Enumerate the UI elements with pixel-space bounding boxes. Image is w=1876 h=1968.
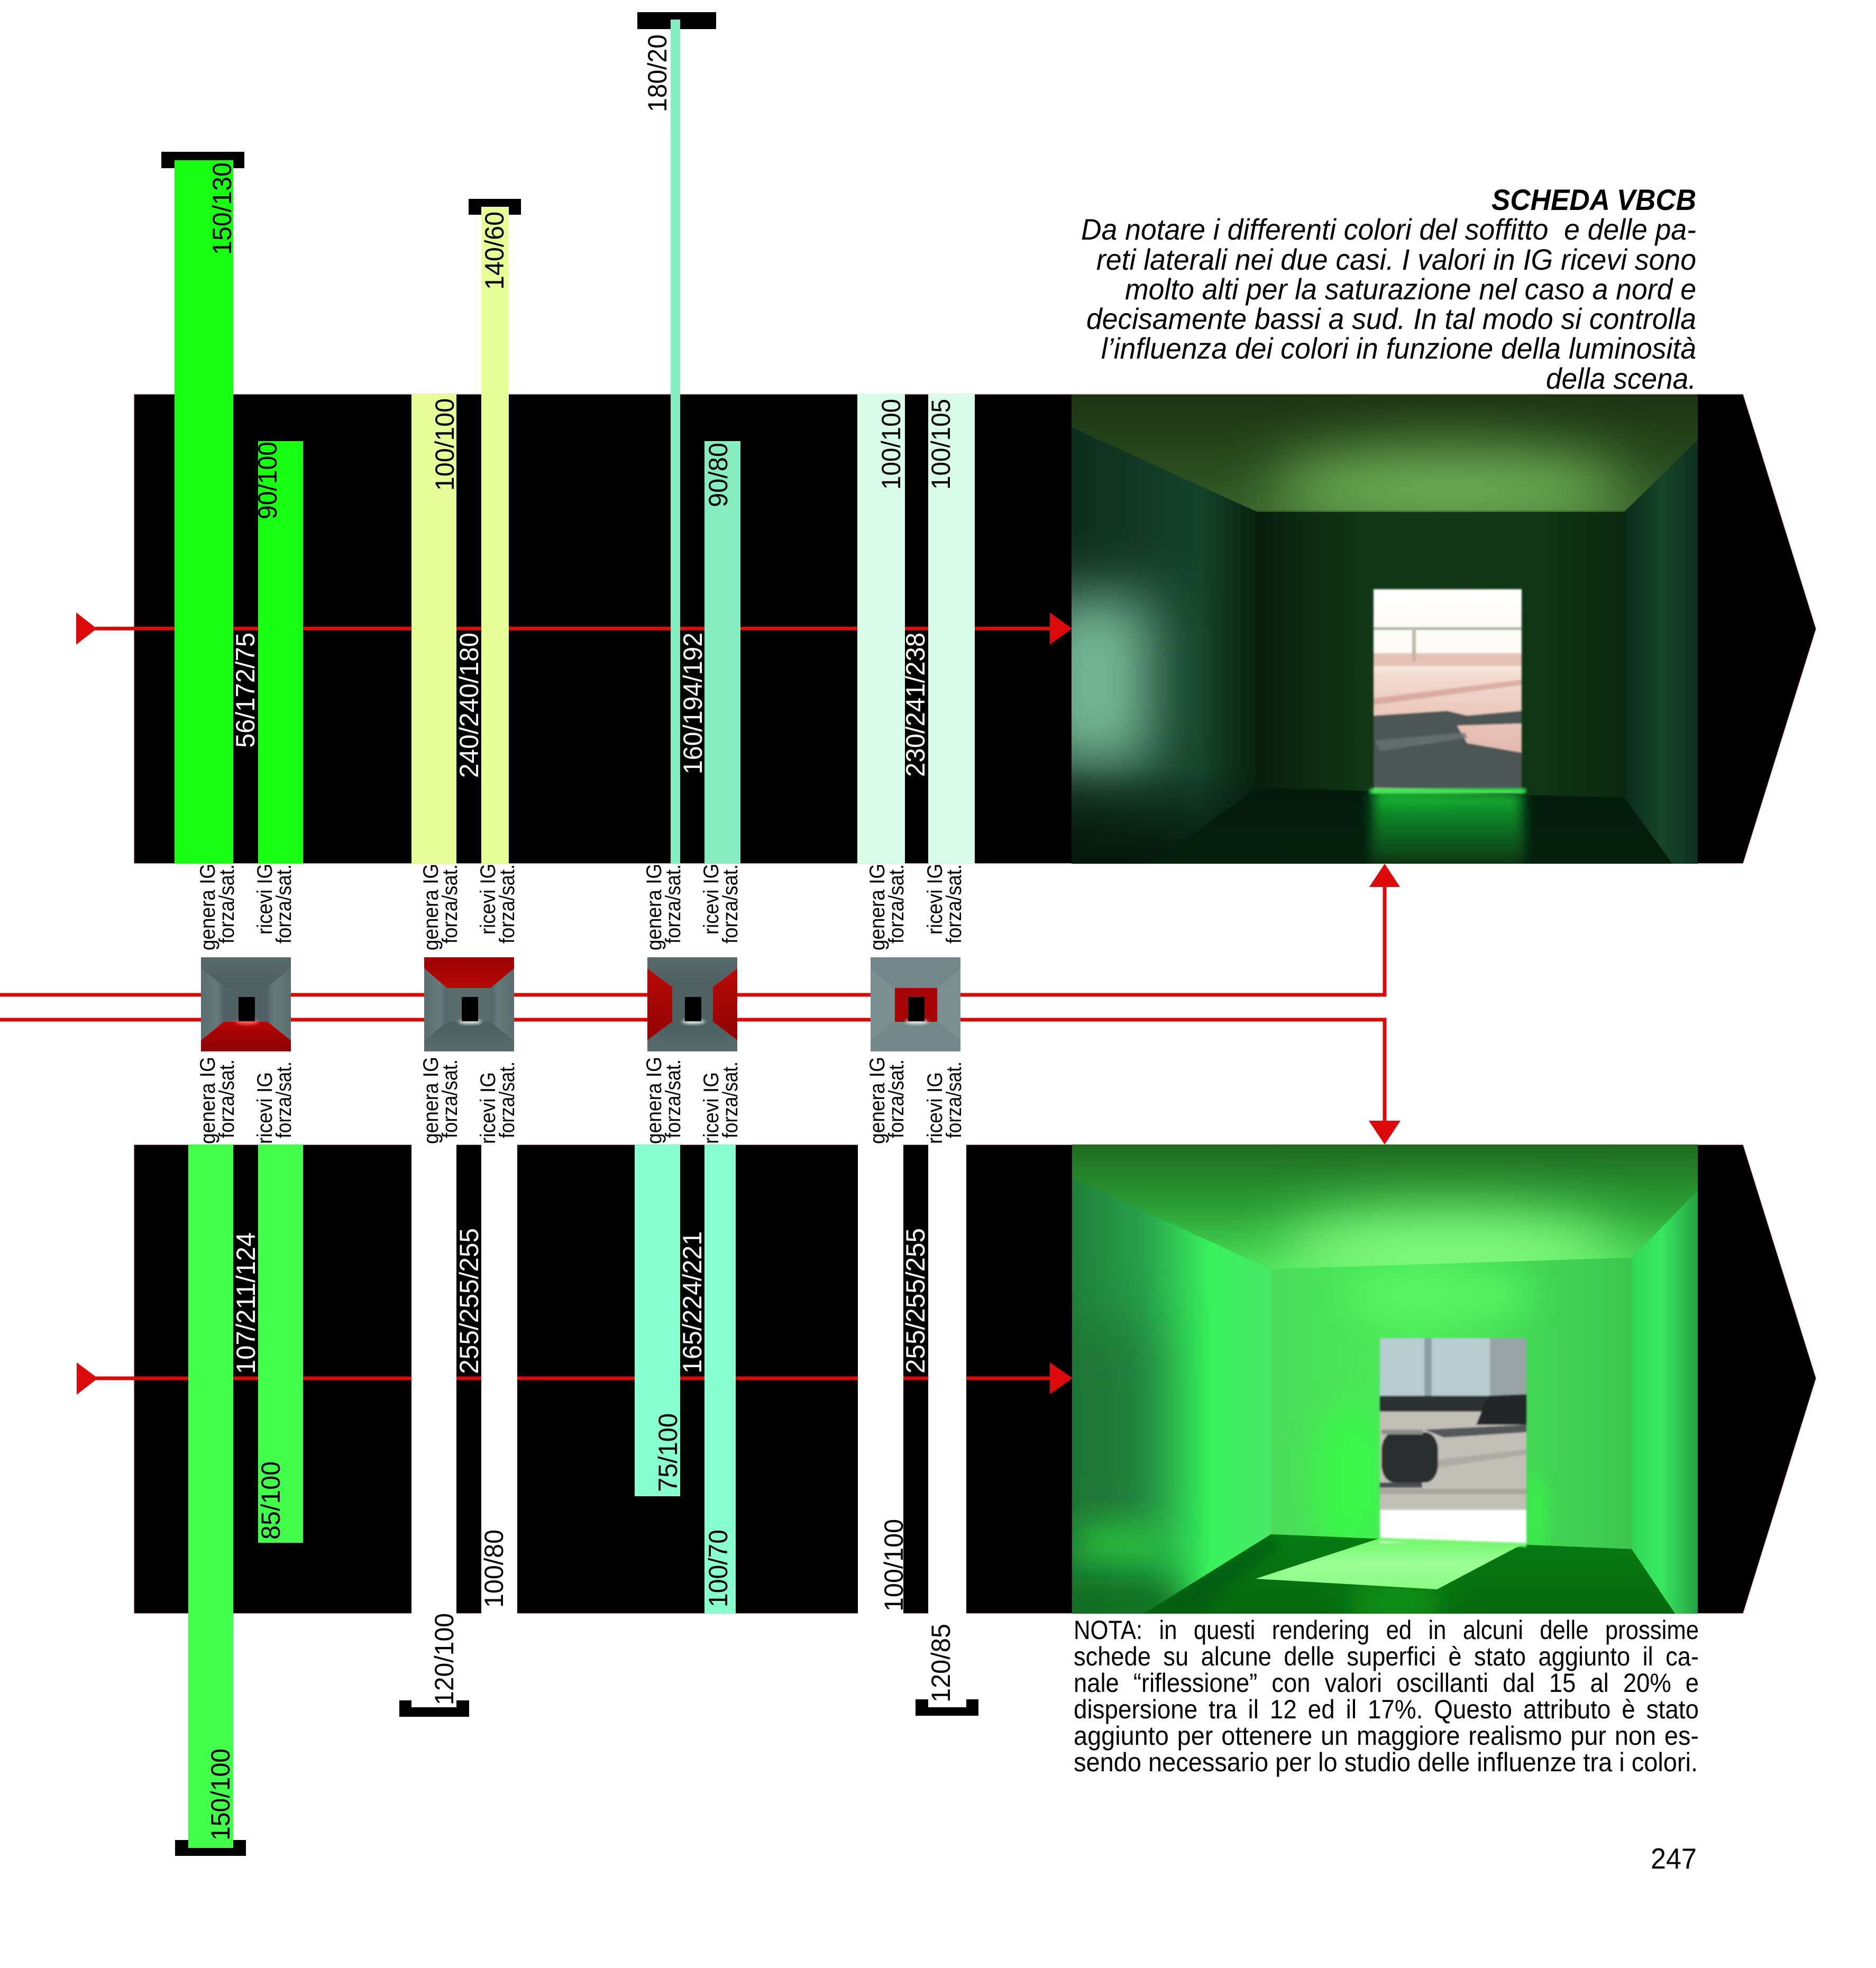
page number: 247 [1651,1842,1697,1875]
panel: south scenario black band with arrow tip [134,1145,1816,1614]
text block: scheda description: decisamente bassi a sud. In tal modo si controlla [1086,302,1696,335]
labels below thumbnail 3: ricevi IG [700,1072,723,1144]
chart: north column 4 bars: 100/100 [876,399,906,490]
text block: scheda description: l’influenza dei colori in funzione della luminosità [1101,332,1696,365]
labels below thumbnail 2: forza/sat. [438,1059,462,1138]
chart: north column 4 bars [857,393,975,864]
labels below thumbnail 4 [866,1057,966,1144]
chart: south column 1 bars: 150/100 [206,1749,235,1841]
labels below thumbnail 3: genera IG [643,1057,666,1144]
chart: north column 4 bars: 100/105 [926,399,956,490]
photo: view through north door [1374,589,1522,793]
thumbnail: red floor [201,957,291,1051]
render: north scene room [1037,394,1698,864]
chart: south column 1 bars: 85/100 [256,1461,286,1540]
text block: nota: dispersione tra il 12 ed il 17%. Questo attributo è stato [1074,1695,1699,1724]
labels above thumbnail 1: ricevi IG [253,864,277,935]
labels above thumbnail 2: ricevi IG [477,864,500,935]
labels below thumbnail 3 [643,1057,742,1144]
chart: south column 3 bars: 100/70 [703,1530,733,1607]
arrow: north timeline red line [76,612,1072,645]
labels below thumbnail 2 [419,1057,519,1144]
labels below thumbnail 1: genera IG [196,1057,219,1144]
chart: south column 4 bars: 255/255/255 [901,1228,930,1374]
labels below thumbnail 1: ricevi IG [253,1072,277,1144]
text block: nota: sendo necessario per lo studio delle influenze tra i colori. [1074,1747,1698,1777]
labels above thumbnail 3: ricevi IG [700,864,723,935]
labels below thumbnail 1: forza/sat. [215,1059,239,1138]
labels below thumbnail 3: forza/sat. [719,1061,742,1138]
chart: north column 3 bars [637,12,740,864]
labels above thumbnail 3: genera IG [643,864,666,950]
labels below thumbnail 1 [196,1057,296,1144]
chart: south column 1 bars: 107/211/124 [231,1232,261,1374]
text block: scheda description: della scena. [1546,362,1696,395]
text block: nota: nale “riflessione” con valori oscillanti dal 15 al 20% e [1074,1668,1699,1698]
labels above thumbnail 3: forza/sat. [719,864,742,944]
chart: north column 1 bars [161,152,303,864]
labels above thumbnail 1: genera IG [196,864,219,950]
text block: nota [1074,1615,1699,1777]
arrow: connector to north render [0,864,1400,995]
labels above thumbnail 1 [196,864,296,950]
labels below thumbnail 4: forza/sat. [942,1061,966,1138]
labels above thumbnail 3 [643,864,742,950]
labels above thumbnail 1: forza/sat. [272,864,296,944]
labels above thumbnail 4: ricevi IG [923,864,947,935]
chart: north column 1 bars: 90/100 [253,442,282,519]
arrow: south timeline red line [77,1362,1073,1395]
photo: view through south door [1380,1338,1526,1547]
labels below thumbnail 2: genera IG [419,1057,443,1144]
labels above thumbnail 4 [866,864,966,950]
labels above thumbnail 2: genera IG [419,864,443,950]
labels below thumbnail 4: forza/sat. [885,1059,908,1138]
chart: south column 2 bars [399,1144,517,1717]
text block: nota: schede su alcune delle superfici è stato aggiunto il ca- [1074,1642,1699,1671]
render: south scene room [1053,1145,1698,1632]
labels below thumbnail 4: genera IG [866,1057,889,1144]
text block: scheda description: Da notare i differenti colori del soffitto e delle pa- [1081,213,1696,246]
chart: north column 3 bars: 160/194/192 [678,633,708,774]
arrow: connector to south render [0,1020,1401,1145]
labels above thumbnail 1: forza/sat. [215,864,239,944]
text block: scheda description [1081,213,1696,395]
chart: south column 2 bars: 100/80 [479,1530,509,1608]
title: SCHEDA VBCB: SCHEDA VBCB [1491,183,1696,216]
text block: scheda description: reti laterali nei due casi. I valori in IG ricevi sono [1096,243,1696,276]
chart: north column 3 bars: 180/20 [643,34,672,112]
chart: north column 1 bars: 150/130 [207,162,237,255]
sunlight patch on floor [1256,1539,1525,1589]
labels below thumbnail 4: ricevi IG [923,1072,947,1144]
labels below thumbnail 2: ricevi IG [477,1072,500,1144]
thumbnail: red ceiling [424,957,514,1051]
labels below thumbnail 3: forza/sat. [662,1059,685,1138]
text block: nota: NOTA: in questi rendering ed in alcuni delle prossime [1074,1615,1699,1645]
labels below thumbnail 2: forza/sat. [496,1061,519,1138]
labels above thumbnail 2: forza/sat. [496,864,519,944]
chart: south column 3 bars: 165/224/221 [678,1231,707,1374]
chart: south column 2 bars: 255/255/255 [454,1228,484,1374]
chart: north column 1 bars: 56/172/75 [231,633,260,748]
text block: scheda description: molto alti per la saturazione nel caso a nord e [1125,272,1696,306]
chart: south column 3 bars: 75/100 [653,1413,683,1492]
chart: north column 3 bars: 90/80 [703,443,733,507]
chart: north column 2 bars [411,199,521,864]
labels above thumbnail 2 [419,864,519,950]
chart: south column 3 bars [635,1145,736,1614]
chart: south column 1 bars [175,1145,303,1856]
chart: north column 2 bars: 100/100 [430,398,460,491]
chart: north column 2 bars: 140/60 [480,212,509,290]
labels above thumbnail 4: forza/sat. [885,864,908,944]
chart: south column 4 bars [858,1144,978,1716]
chart: south column 2 bars: 120/100 [429,1613,459,1705]
labels above thumbnail 4: forza/sat. [942,864,966,944]
chart: north column 4 bars: 230/241/238 [901,633,930,777]
labels above thumbnail 3: forza/sat. [662,864,685,944]
thumbnail: red back wall [871,957,960,1051]
chart: south column 4 bars: 100/100 [879,1519,909,1612]
thumbnail: red side walls [647,957,737,1051]
labels below thumbnail 1: forza/sat. [272,1061,296,1138]
panel: north scenario black band with arrow tip [134,394,1816,864]
labels above thumbnail 2: forza/sat. [438,864,462,944]
labels above thumbnail 4: genera IG [866,864,889,950]
chart: south column 4 bars: 120/85 [926,1624,956,1702]
chart: north column 2 bars: 240/240/180 [454,633,484,778]
text block: nota: aggiunto per ottenere un maggiore realismo pur non es- [1074,1721,1699,1751]
